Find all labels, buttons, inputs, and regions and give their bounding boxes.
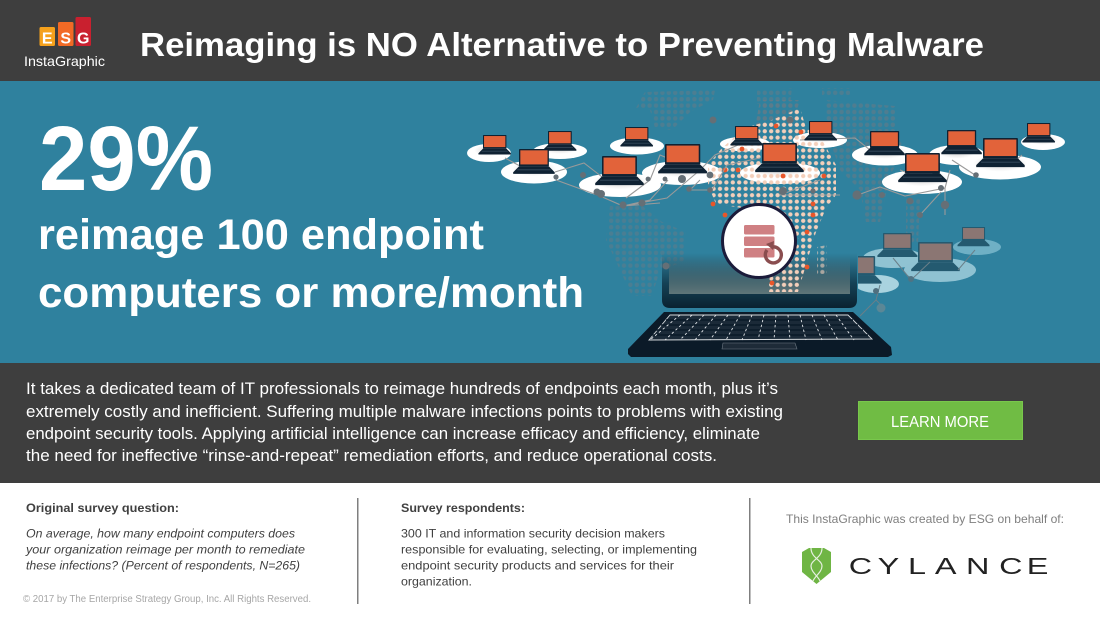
survey question column: On average, how many endpoint computers does xyxy=(26,526,295,540)
survey respondents column: organization. xyxy=(401,574,472,588)
ESG logo: E xyxy=(42,30,53,48)
world map: grey dotted regions xyxy=(606,88,920,296)
dark description panel xyxy=(0,363,1100,483)
survey respondents column: Survey respondents: xyxy=(401,501,525,515)
large laptop screen xyxy=(662,253,857,308)
world map: Madagascar xyxy=(817,245,827,274)
orange map highlights xyxy=(711,124,826,285)
Cylance logo xyxy=(802,548,1048,584)
description text xyxy=(26,379,783,465)
ESG logo: G xyxy=(77,30,89,48)
teal hero panel xyxy=(0,81,1100,363)
small laptops xyxy=(478,121,1055,185)
headline line one: reimage 100 endpoint xyxy=(38,211,484,259)
description text: It takes a dedicated team of IT professionals to reimage hundreds of endpoints each month, plus it’s xyxy=(26,379,778,398)
survey respondents column: endpoint security products and services for their xyxy=(401,558,674,572)
ESG logo xyxy=(40,17,91,48)
large laptop keyboard base xyxy=(628,312,892,357)
survey respondents column: 300 IT and information security decision makers xyxy=(401,526,665,540)
ESG logo: S xyxy=(60,30,71,48)
survey question column: these infections? (Percent of respondents, N=265) xyxy=(26,558,300,572)
network illustration xyxy=(467,88,1065,357)
description text: extremely costly and inefficient. Suffering multiple malware infections points to problems with existing xyxy=(26,402,783,421)
laptop pads xyxy=(467,132,1065,197)
learn more button xyxy=(858,402,1022,440)
header band xyxy=(0,0,1100,81)
InstaGraphic label: InstaGraphic xyxy=(24,53,105,69)
survey respondents column xyxy=(401,501,697,588)
faded laptop cluster xyxy=(858,227,1001,316)
world map: peach dotted Africa xyxy=(708,108,836,292)
headline statistic: 29% xyxy=(39,108,213,210)
learn more button: LEARN MORE xyxy=(891,414,989,431)
title: Reimaging is NO Alternative to Preventing Malware xyxy=(140,27,984,64)
survey question column: Original survey question: xyxy=(26,501,179,515)
survey question column: your organization reimage per month to remediate xyxy=(25,542,305,556)
reimage icon circle xyxy=(722,204,796,278)
headline line two: computers or more/month xyxy=(38,269,584,317)
copyright: © 2017 by The Enterprise Strategy Group, Inc. All Rights Reserved. xyxy=(23,594,311,605)
survey question column xyxy=(25,501,305,572)
sponsor credit: This InstaGraphic was created by ESG on behalf of: xyxy=(786,512,1064,526)
network connection lines and nodes xyxy=(505,116,1022,270)
Cylance logo: CYLANCE xyxy=(849,552,1048,579)
description text: the need for ineffective “rinse-and-repeat” remediation efforts, and reduce operational costs. xyxy=(26,446,717,465)
description text: endpoint security tools. Applying artificial intelligence can increase efficacy and efficiency, eliminate xyxy=(26,424,760,443)
survey respondents column: responsible for evaluating, selecting, or implementing xyxy=(401,542,697,556)
